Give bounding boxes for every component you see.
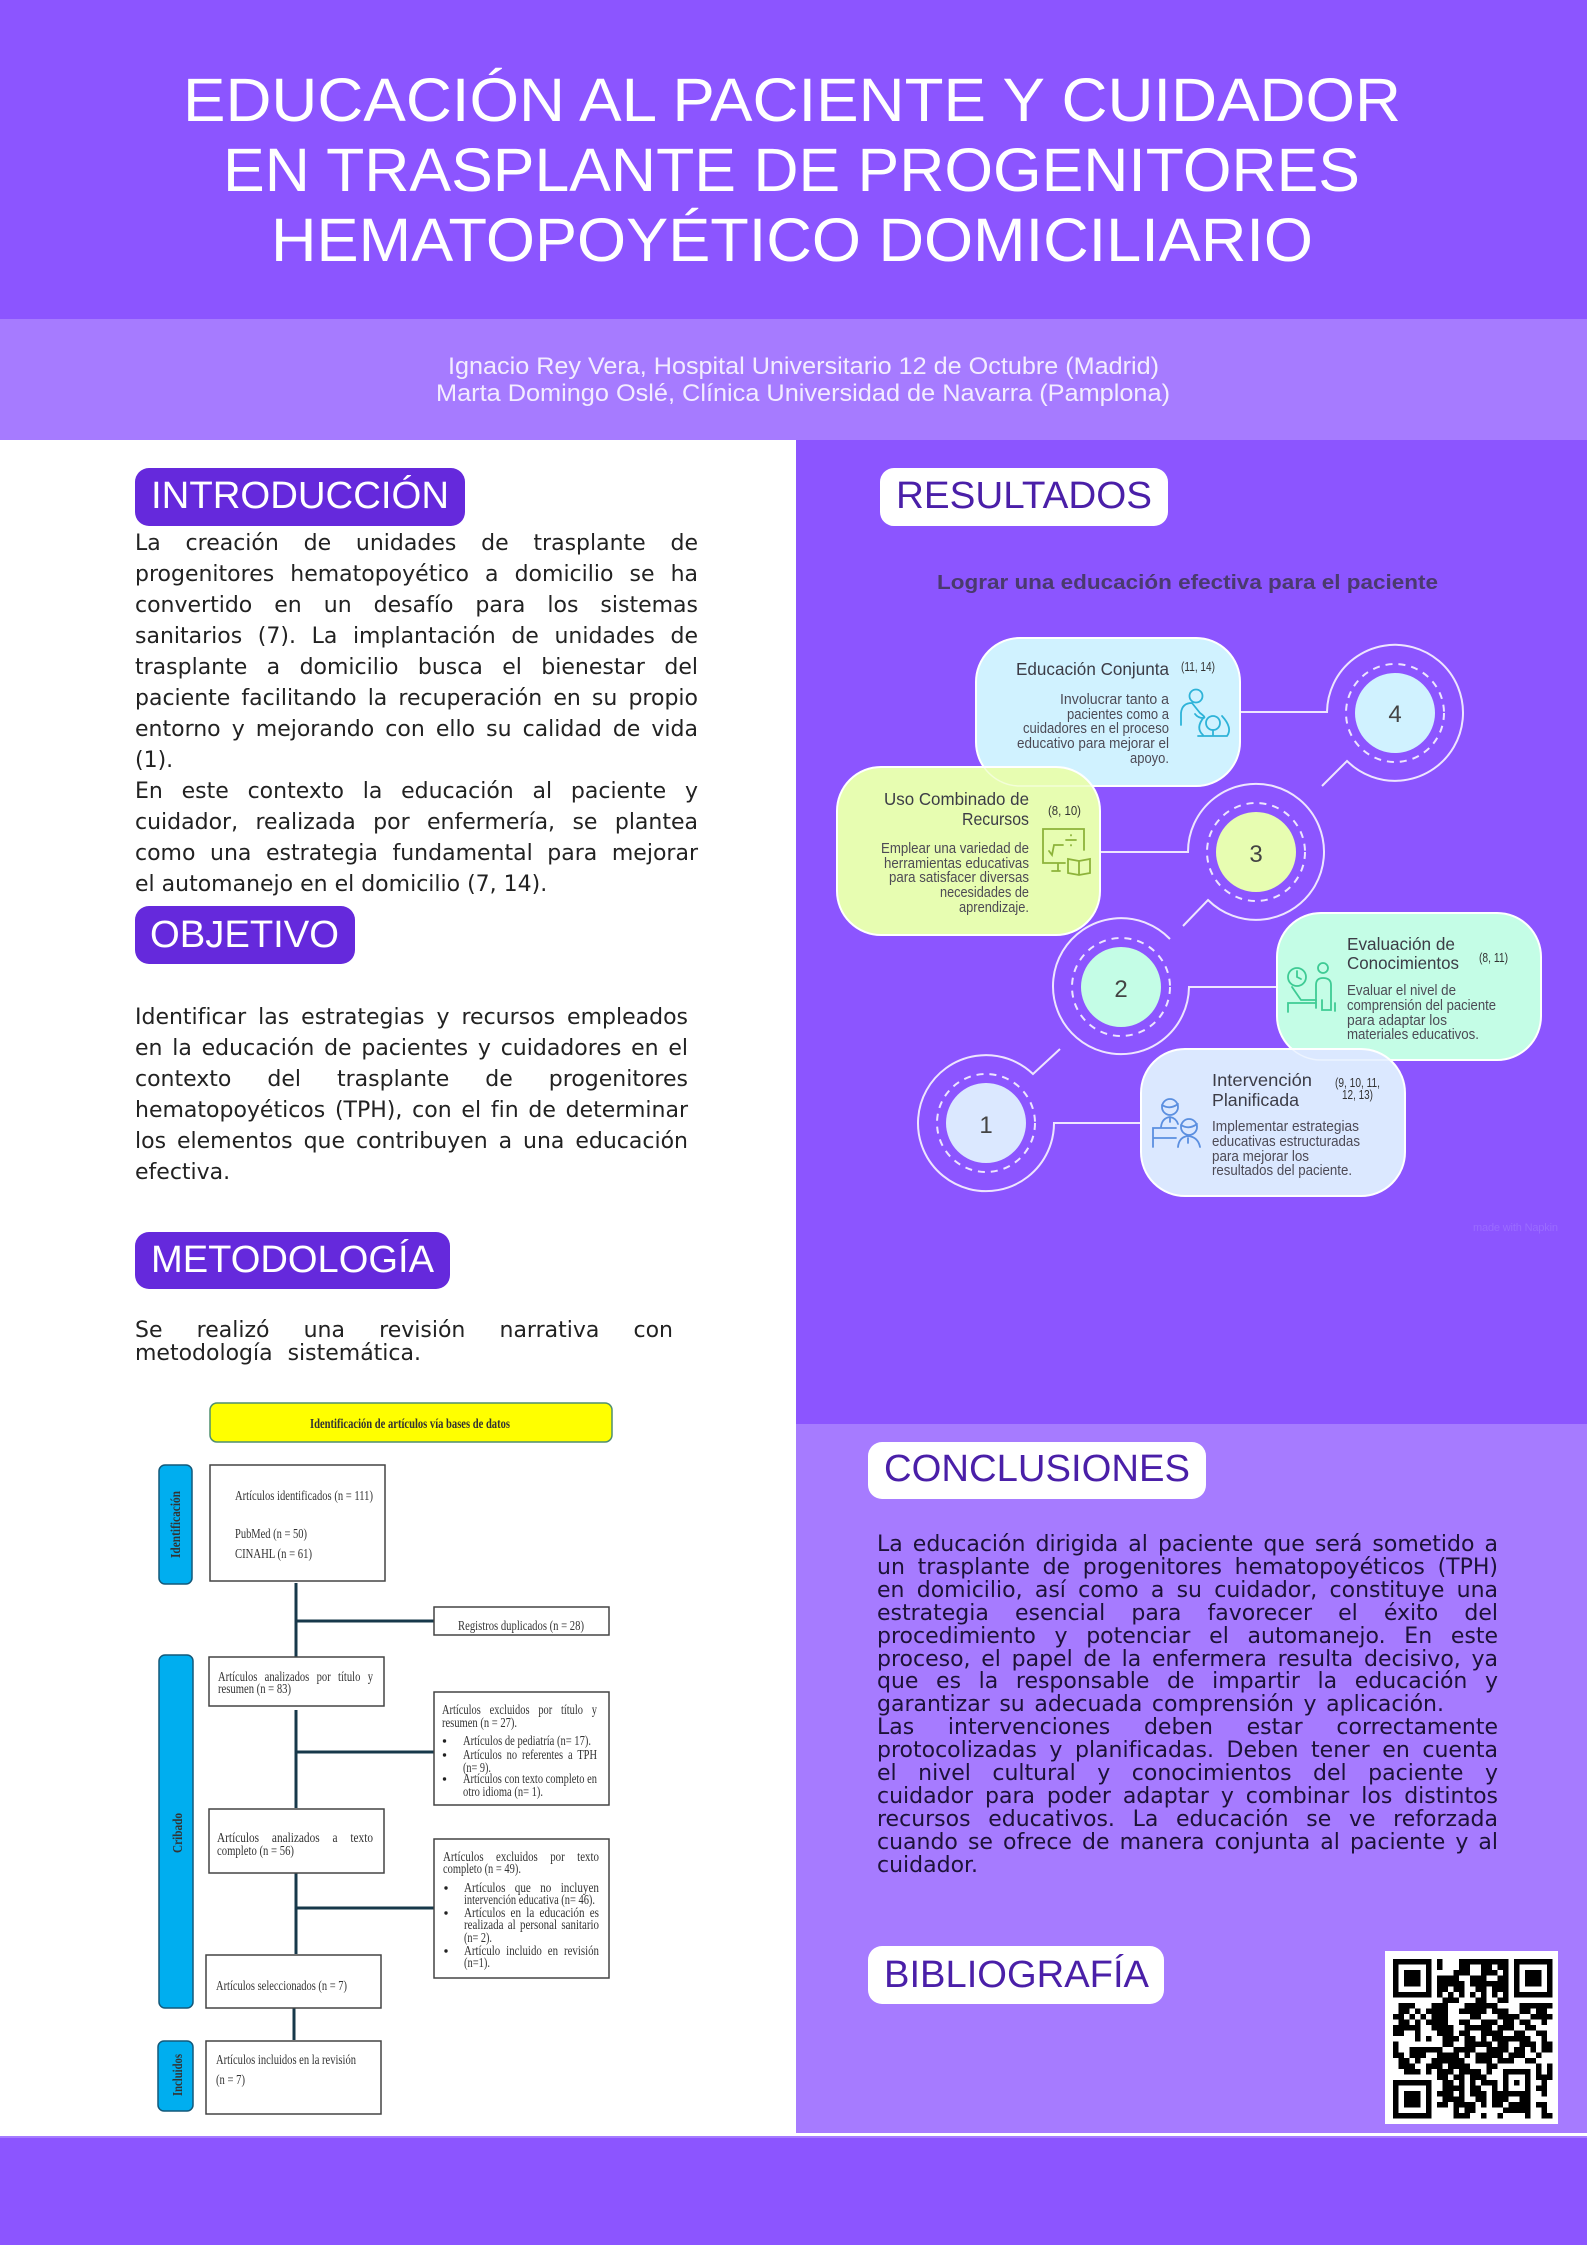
box: excluidos por título: otro idioma (n= 1). <box>463 1784 543 1799</box>
text block: introducción: entorno y mejorando con ello su calidad de vida <box>135 717 698 742</box>
text block: objetivo: en la educación de pacientes y cuidadores en el <box>135 1036 688 1061</box>
text block: introducción: sanitarios (7). La implantación de unidades de <box>135 624 698 649</box>
step 1 card: intervención planificada: Implementar estrategias <box>1212 1119 1359 1135</box>
step 2 card: evaluación de conocimientos: (8, 11) <box>1479 951 1508 965</box>
box: artículos incluidos: Artículos incluidos en la revisión <box>216 2052 356 2067</box>
text block: metodología: metodología sistemática. <box>135 1341 421 1366</box>
box: excluidos por título: Artículos con texto completo en <box>463 1771 597 1786</box>
text block: objetivo: efectiva. <box>135 1160 230 1185</box>
stage label: cribado <box>159 1655 193 2008</box>
box: excluidos por texto completo: (n=1). <box>464 1955 490 1970</box>
text block: conclusiones: estrategia esencial para favorecer el éxito del <box>877 1601 1498 1626</box>
QR code <box>1385 1951 1558 2124</box>
step 4 card: educación conjunta: (11, 14) <box>1181 660 1215 674</box>
box: excluidos por texto completo: realizada al personal sanitario <box>464 1917 599 1932</box>
step 3 marker <box>1100 784 1324 926</box>
step 3 card: uso combinado de recursos: necesidades de <box>940 885 1029 901</box>
box: registros duplicados <box>434 1607 609 1635</box>
box: excluidos por texto completo: completo (n = 49). <box>443 1861 521 1876</box>
text block: introducción: La creación de unidades de trasplante de <box>135 531 698 556</box>
flow header: identificación <box>210 1403 612 1442</box>
text block: conclusiones: La educación dirigida al paciente que será sometido a <box>877 1532 1498 1557</box>
text block: conclusiones: protocolizadas y planificadas. Deben tener en cuenta <box>877 1738 1498 1763</box>
step 4 marker: 4 <box>1388 701 1402 728</box>
text block: introducción: convertido en un desafío para los sistemas <box>135 593 698 618</box>
step 2 marker <box>1053 918 1277 1054</box>
watermark: made with Napkin <box>1473 1222 1558 1234</box>
step 2 card: evaluación de conocimientos: para adaptar los <box>1347 1013 1447 1029</box>
text block: conclusiones: cuidador para poder adaptar y combinar los distintos <box>877 1784 1498 1809</box>
text block: introducción: cuidador, realizada por enfermería, se plantea <box>135 810 698 835</box>
box: excluidos por texto completo <box>434 1839 609 1978</box>
heading: conclusiones: CONCLUSIONES <box>884 1448 1190 1490</box>
flow header: identificación: Identificación de artículos vía bases de datos <box>310 1416 510 1431</box>
box: excluidos por texto completo: Artículos que no incluyen <box>464 1880 599 1895</box>
icon: board and book <box>1043 829 1090 875</box>
panel: title header: HEMATOPOYÉTICO DOMICILIARIO <box>271 206 1313 274</box>
box: analizados a texto completo: Artículos analizados a texto <box>217 1830 373 1845</box>
text block: introducción: el automanejo en el domicilio (7, 14). <box>135 872 547 897</box>
stage label: identificación: Identificación <box>168 1491 183 1558</box>
text block: conclusiones <box>877 1532 1498 1878</box>
text block: objetivo: Identificar las estrategias y recursos empleados <box>135 1005 688 1030</box>
chart title: Lograr una educación efectiva para el paciente <box>937 572 1438 594</box>
box: registros duplicados: Registros duplicados (n = 28) <box>458 1618 584 1633</box>
step 2 card: evaluación de conocimientos: Conocimientos <box>1347 953 1459 973</box>
step 2 card: evaluación de conocimientos: comprensión del paciente <box>1347 998 1496 1014</box>
text block: conclusiones: garantizar su adecuada comprensión y aplicación. <box>877 1692 1444 1717</box>
stage label: cribado: Cribado <box>170 1813 185 1853</box>
box: analizados por título: resumen (n = 83) <box>218 1681 291 1696</box>
diagram: education steps <box>837 638 1541 1196</box>
stage label: identificación <box>159 1465 192 1584</box>
box: excluidos por título: resumen (n = 27). <box>442 1715 517 1730</box>
text block: conclusiones: proceso, el papel de la enfermera resulta decisivo, ya <box>877 1647 1498 1672</box>
step 2 card: evaluación de conocimientos <box>1277 913 1541 1060</box>
step 3 card: uso combinado de recursos <box>837 638 1240 935</box>
panel: authors band: Marta Domingo Oslé, Clínica Universidad de Navarra (Pamplona) <box>436 380 1170 407</box>
step 1 card: intervención planificada: 12, 13) <box>1342 1088 1373 1102</box>
box: analizados por título <box>209 1657 384 1706</box>
step 3 marker: 3 <box>1249 841 1263 868</box>
step 2 card: evaluación de conocimientos: materiales educativos. <box>1347 1027 1479 1043</box>
step 4 card: educación conjunta: educativo para mejorar el <box>1017 736 1169 752</box>
heading: metodología <box>135 1232 450 1289</box>
step 3 card: uso combinado de recursos: para satisfacer diversas <box>889 870 1029 886</box>
text block: objetivo: hematopoyéticos (TPH), con el fin de determinar <box>135 1098 688 1123</box>
step 4 card: educación conjunta: Involucrar tanto a <box>1060 692 1170 708</box>
stage label: incluidos <box>158 2041 193 2111</box>
text block: introducción: trasplante a domicilio busca el bienestar del <box>135 655 698 680</box>
text block: introducción <box>135 531 698 897</box>
step 4 card: educación conjunta: cuidadores en el proceso <box>1023 721 1169 737</box>
text block: conclusiones: que es la responsable de impartir la educación y <box>877 1669 1498 1694</box>
panel: authors band: Ignacio Rey Vera, Hospital Universitario 12 de Octubre (Madrid) <box>448 353 1159 380</box>
step 1 card: intervención planificada: educativas estructuradas <box>1212 1134 1360 1150</box>
panel: title header <box>0 0 1587 319</box>
text block: conclusiones: Las intervenciones deben estar correctamente <box>877 1715 1498 1740</box>
step 4 card: educación conjunta: Educación Conjunta <box>1016 659 1169 679</box>
text block: introducción: En este contexto la educación al paciente y <box>135 779 698 804</box>
text block: introducción: progenitores hematopoyético a domicilio se ha <box>135 562 698 587</box>
step 4 card: educación conjunta: apoyo. <box>1130 751 1169 767</box>
box: artículos identificados: Artículos identificados (n = 111) <box>235 1488 373 1503</box>
box: artículos seleccionados: Artículos seleccionados (n = 7) <box>216 1978 347 1993</box>
step 3 card: uso combinado de recursos: Emplear una variedad de <box>881 841 1029 857</box>
icon: nurse and patient at desk <box>1153 1099 1200 1147</box>
box: analizados a texto completo <box>209 1809 384 1873</box>
text block: conclusiones: cuidador. <box>877 1853 978 1878</box>
box: analizados a texto completo: completo (n = 56) <box>217 1843 294 1858</box>
icon: caregiver and patient <box>1181 690 1229 736</box>
box: excluidos por texto completo: intervención educativa (n= 46). <box>464 1892 595 1907</box>
box: artículos identificados <box>210 1465 385 1581</box>
panel: results background <box>796 440 1587 1424</box>
text block: metodología <box>135 1318 673 1366</box>
step 3 card: uso combinado de recursos: (8, 10) <box>1048 804 1081 818</box>
box: artículos identificados: CINAHL (n = 61) <box>235 1546 312 1561</box>
panel: footer band <box>0 2136 1587 2245</box>
heading: introducción <box>135 468 465 526</box>
step 1 card: intervención planificada: Intervención <box>1212 1070 1312 1090</box>
heading: bibliografía <box>868 1946 1164 2004</box>
step 1 marker <box>918 1049 1141 1191</box>
text block: conclusiones: el nivel cultural y conocimientos del paciente y <box>877 1761 1498 1786</box>
text block: metodología: Se realizó una revisión narrativa con <box>135 1318 673 1343</box>
panel: title header: EDUCACIÓN AL PACIENTE Y CUIDADOR <box>183 66 1401 134</box>
box: artículos incluidos: (n = 7) <box>216 2072 245 2087</box>
step 3 card: uso combinado de recursos: aprendizaje. <box>959 900 1029 916</box>
panel: conclusions background <box>796 1424 1587 2133</box>
step 1 card: intervención planificada: Planificada <box>1212 1090 1299 1110</box>
box: artículos identificados: PubMed (n = 50) <box>235 1526 307 1541</box>
step 3 card: uso combinado de recursos: herramientas educativas <box>884 856 1029 872</box>
stage label: incluidos: Incluidos <box>170 2054 185 2096</box>
step 2 card: evaluación de conocimientos: Evaluación de <box>1347 934 1455 954</box>
text block: objetivo: contexto del trasplante de progenitores <box>135 1067 688 1092</box>
text block: conclusiones: recursos educativos. La educación se ve reforzada <box>877 1807 1498 1832</box>
text block: objetivo: los elementos que contribuyen a una educación <box>135 1129 688 1154</box>
heading: objetivo <box>135 906 355 964</box>
step 3 card: uso combinado de recursos: Recursos <box>962 809 1029 829</box>
heading: objetivo: OBJETIVO <box>150 914 339 956</box>
flow diagram: article selection <box>158 1403 612 2114</box>
step 1 card: intervención planificada <box>1141 913 1541 1196</box>
text block: conclusiones: cuando se ofrece de manera conjunta al paciente y al <box>877 1830 1498 1855</box>
heading: metodología: METODOLOGÍA <box>151 1238 435 1281</box>
step 2 card: evaluación de conocimientos: Evaluar el nivel de <box>1347 983 1456 999</box>
heading: introducción: INTRODUCCIÓN <box>151 474 449 517</box>
text block: introducción: paciente facilitando la recuperación en su propio <box>135 686 698 711</box>
text block: conclusiones: procedimiento y potenciar el automanejo. En este <box>877 1624 1498 1649</box>
step 4 card: educación conjunta <box>976 638 1240 786</box>
box: excluidos por texto completo: Artículos en la educación es <box>464 1905 599 1920</box>
heading: conclusiones <box>868 1442 1206 1499</box>
box: excluidos por texto completo: Artículos excluidos por texto <box>443 1849 599 1864</box>
text block: introducción: como una estrategia fundamental para mejorar <box>135 841 698 866</box>
step 1 marker: 1 <box>979 1112 993 1139</box>
flow connectors <box>294 1583 434 2040</box>
heading: bibliografía: BIBLIOGRAFÍA <box>884 1953 1150 1996</box>
icon: patient assessment <box>1288 963 1335 1012</box>
box: excluidos por texto completo: Artículo incluido en revisión <box>464 1943 599 1958</box>
box: excluidos por título: Artículos de pediatría (n= 17). <box>463 1733 591 1748</box>
step 3 card: uso combinado de recursos: Uso Combinado de <box>884 789 1029 809</box>
step 1 card: intervención planificada: resultados del paciente. <box>1212 1163 1352 1179</box>
box: artículos seleccionados <box>206 1955 381 2008</box>
box: excluidos por título: Artículos no referentes a TPH <box>463 1747 597 1762</box>
step 1 card: intervención planificada: (9, 10, 11, <box>1335 1076 1380 1090</box>
box: excluidos por texto completo: (n= 2). <box>464 1930 492 1945</box>
step 2 marker: 2 <box>1114 976 1128 1003</box>
step 4 card: educación conjunta: pacientes como a <box>1067 707 1170 723</box>
step 4 marker <box>1240 645 1463 786</box>
panel: title header: EN TRASPLANTE DE PROGENITORES <box>223 136 1360 204</box>
box: excluidos por título: Artículos excluidos por título y <box>442 1702 597 1717</box>
text block: objetivo <box>135 1005 688 1185</box>
panel: authors band <box>0 319 1587 440</box>
box: excluidos por título <box>434 1692 609 1805</box>
text block: conclusiones: un trasplante de progenitores hematopoyéticos (TPH) <box>877 1555 1498 1580</box>
text block: conclusiones: en domicilio, así como a su cuidador, constituye una <box>877 1578 1498 1603</box>
heading: resultados: RESULTADOS <box>896 475 1152 517</box>
box: artículos incluidos <box>206 2041 381 2114</box>
text block: introducción: (1). <box>135 748 173 773</box>
step 1 card: intervención planificada: para mejorar los <box>1212 1149 1309 1165</box>
heading: resultados <box>880 468 1168 526</box>
box: analizados por título: Artículos analizados por título y <box>218 1669 373 1684</box>
box: excluidos por título: (n= 9). <box>463 1760 491 1775</box>
